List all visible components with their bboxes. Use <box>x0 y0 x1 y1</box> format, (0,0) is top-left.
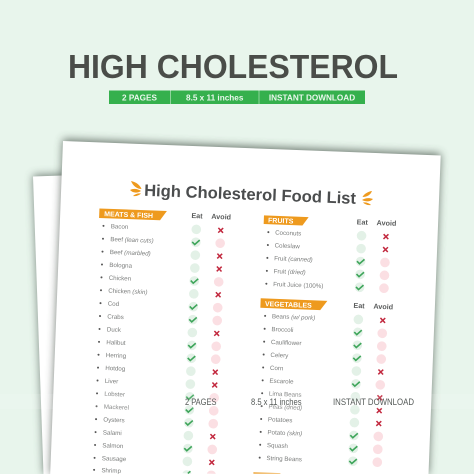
back page <box>33 172 130 474</box>
info: size: 8.5 x 11 inches <box>186 93 244 102</box>
list: meats and fish: Salmon <box>102 442 124 450</box>
list: fruits: Fruit Juice (100%) <box>273 281 323 290</box>
list: fruits: Fruit (canned) <box>274 255 313 264</box>
list: meats and fish: Chicken <box>109 275 132 283</box>
watermark: size: 8.5 x 11 inches <box>251 397 302 408</box>
list: vegetables: String Beans <box>266 455 302 463</box>
list: meats and fish: Mackerel <box>104 404 129 412</box>
eat and avoid headers: meats: Eat <box>191 211 203 220</box>
list: meats and fish: Beef (lean cuts) <box>110 236 154 245</box>
info: download: INSTANT DOWNLOAD <box>269 93 355 102</box>
list: vegetables: Peas (dried) <box>268 403 302 412</box>
list: meats and fish: Lobster <box>104 391 125 399</box>
banner: cropped next section <box>253 472 280 474</box>
icon: right heading accent <box>362 191 373 205</box>
list: vegetables: Cauliflower <box>271 339 302 347</box>
list: vegetables: Potatoes <box>268 416 292 424</box>
icon: left heading accent <box>130 181 142 196</box>
list: meats and fish: Duck <box>107 326 122 334</box>
list: meats and fish: Liver <box>105 378 118 385</box>
list: fruits: Fruit (dried) <box>274 268 306 276</box>
list: meats and fish: Herring <box>106 352 127 360</box>
list: vegetables: Escarole <box>269 378 294 386</box>
list: fruits: Coleslaw <box>274 242 300 250</box>
front page sheet <box>50 141 441 474</box>
eat and avoid headers: fruits: Eat <box>357 217 369 227</box>
eat and avoid headers: meats <box>191 211 231 222</box>
list: vegetables: Broccoli <box>271 326 294 334</box>
list: meats and fish: Sausage <box>102 455 127 463</box>
list: meats and fish <box>93 221 226 474</box>
front page shadow <box>50 139 441 474</box>
eat and avoid headers: fruits: Avoid <box>376 218 397 228</box>
list: meats and fish: Crabs <box>107 313 124 321</box>
list: fruits: Coconuts <box>275 230 301 238</box>
list: vegetables <box>259 311 388 467</box>
page heading: High Cholesterol Food List <box>144 182 357 208</box>
banner: meats and fish: MEATS & FISH <box>104 211 153 220</box>
list: meats and fish: Beef (marbled) <box>110 249 151 258</box>
list: meats and fish: Hotdog <box>105 365 126 373</box>
eat and avoid headers: vegetables: Avoid <box>373 302 393 311</box>
list: vegetables: Lima Beans <box>269 391 302 399</box>
banner: vegetables: VEGETABLES <box>265 301 312 310</box>
list: vegetables: Squash <box>267 442 289 450</box>
list: meats and fish: Oysters <box>103 417 125 424</box>
eat and avoid headers: fruits <box>357 217 397 228</box>
list: meats and fish: Halibut <box>106 339 126 347</box>
watermark band <box>0 394 474 409</box>
watermark: download: INSTANT DOWNLOAD <box>333 397 414 408</box>
list: vegetables: Celery <box>270 352 289 360</box>
list: fruits <box>265 227 391 293</box>
eat and avoid headers: vegetables: Eat <box>353 301 365 310</box>
banner: vegetables <box>260 298 327 310</box>
watermark: pages: 2 PAGES <box>185 397 216 408</box>
banner: fruits <box>264 215 309 226</box>
list: vegetables: Potato (skin) <box>267 429 302 438</box>
title: HIGH CHOLESTEROL <box>68 49 398 86</box>
front page content <box>89 180 398 474</box>
list: meats and fish: Chicken (skin) <box>108 288 148 296</box>
list: meats and fish: Bacon <box>111 223 129 231</box>
list: vegetables: Beans (w/ pork) <box>272 313 315 322</box>
list: meats and fish: Salami <box>103 429 122 437</box>
list: meats and fish: Cod <box>108 301 120 308</box>
list: meats and fish: Bologna <box>109 262 133 270</box>
info: pages: 2 PAGES <box>122 93 157 102</box>
info bar <box>109 90 365 104</box>
banner: meats and fish <box>99 208 167 221</box>
list: vegetables: Corn <box>270 365 284 372</box>
eat and avoid headers: vegetables <box>353 301 393 311</box>
banner: fruits: FRUITS <box>268 218 294 226</box>
eat and avoid headers: meats: Avoid <box>211 212 231 222</box>
